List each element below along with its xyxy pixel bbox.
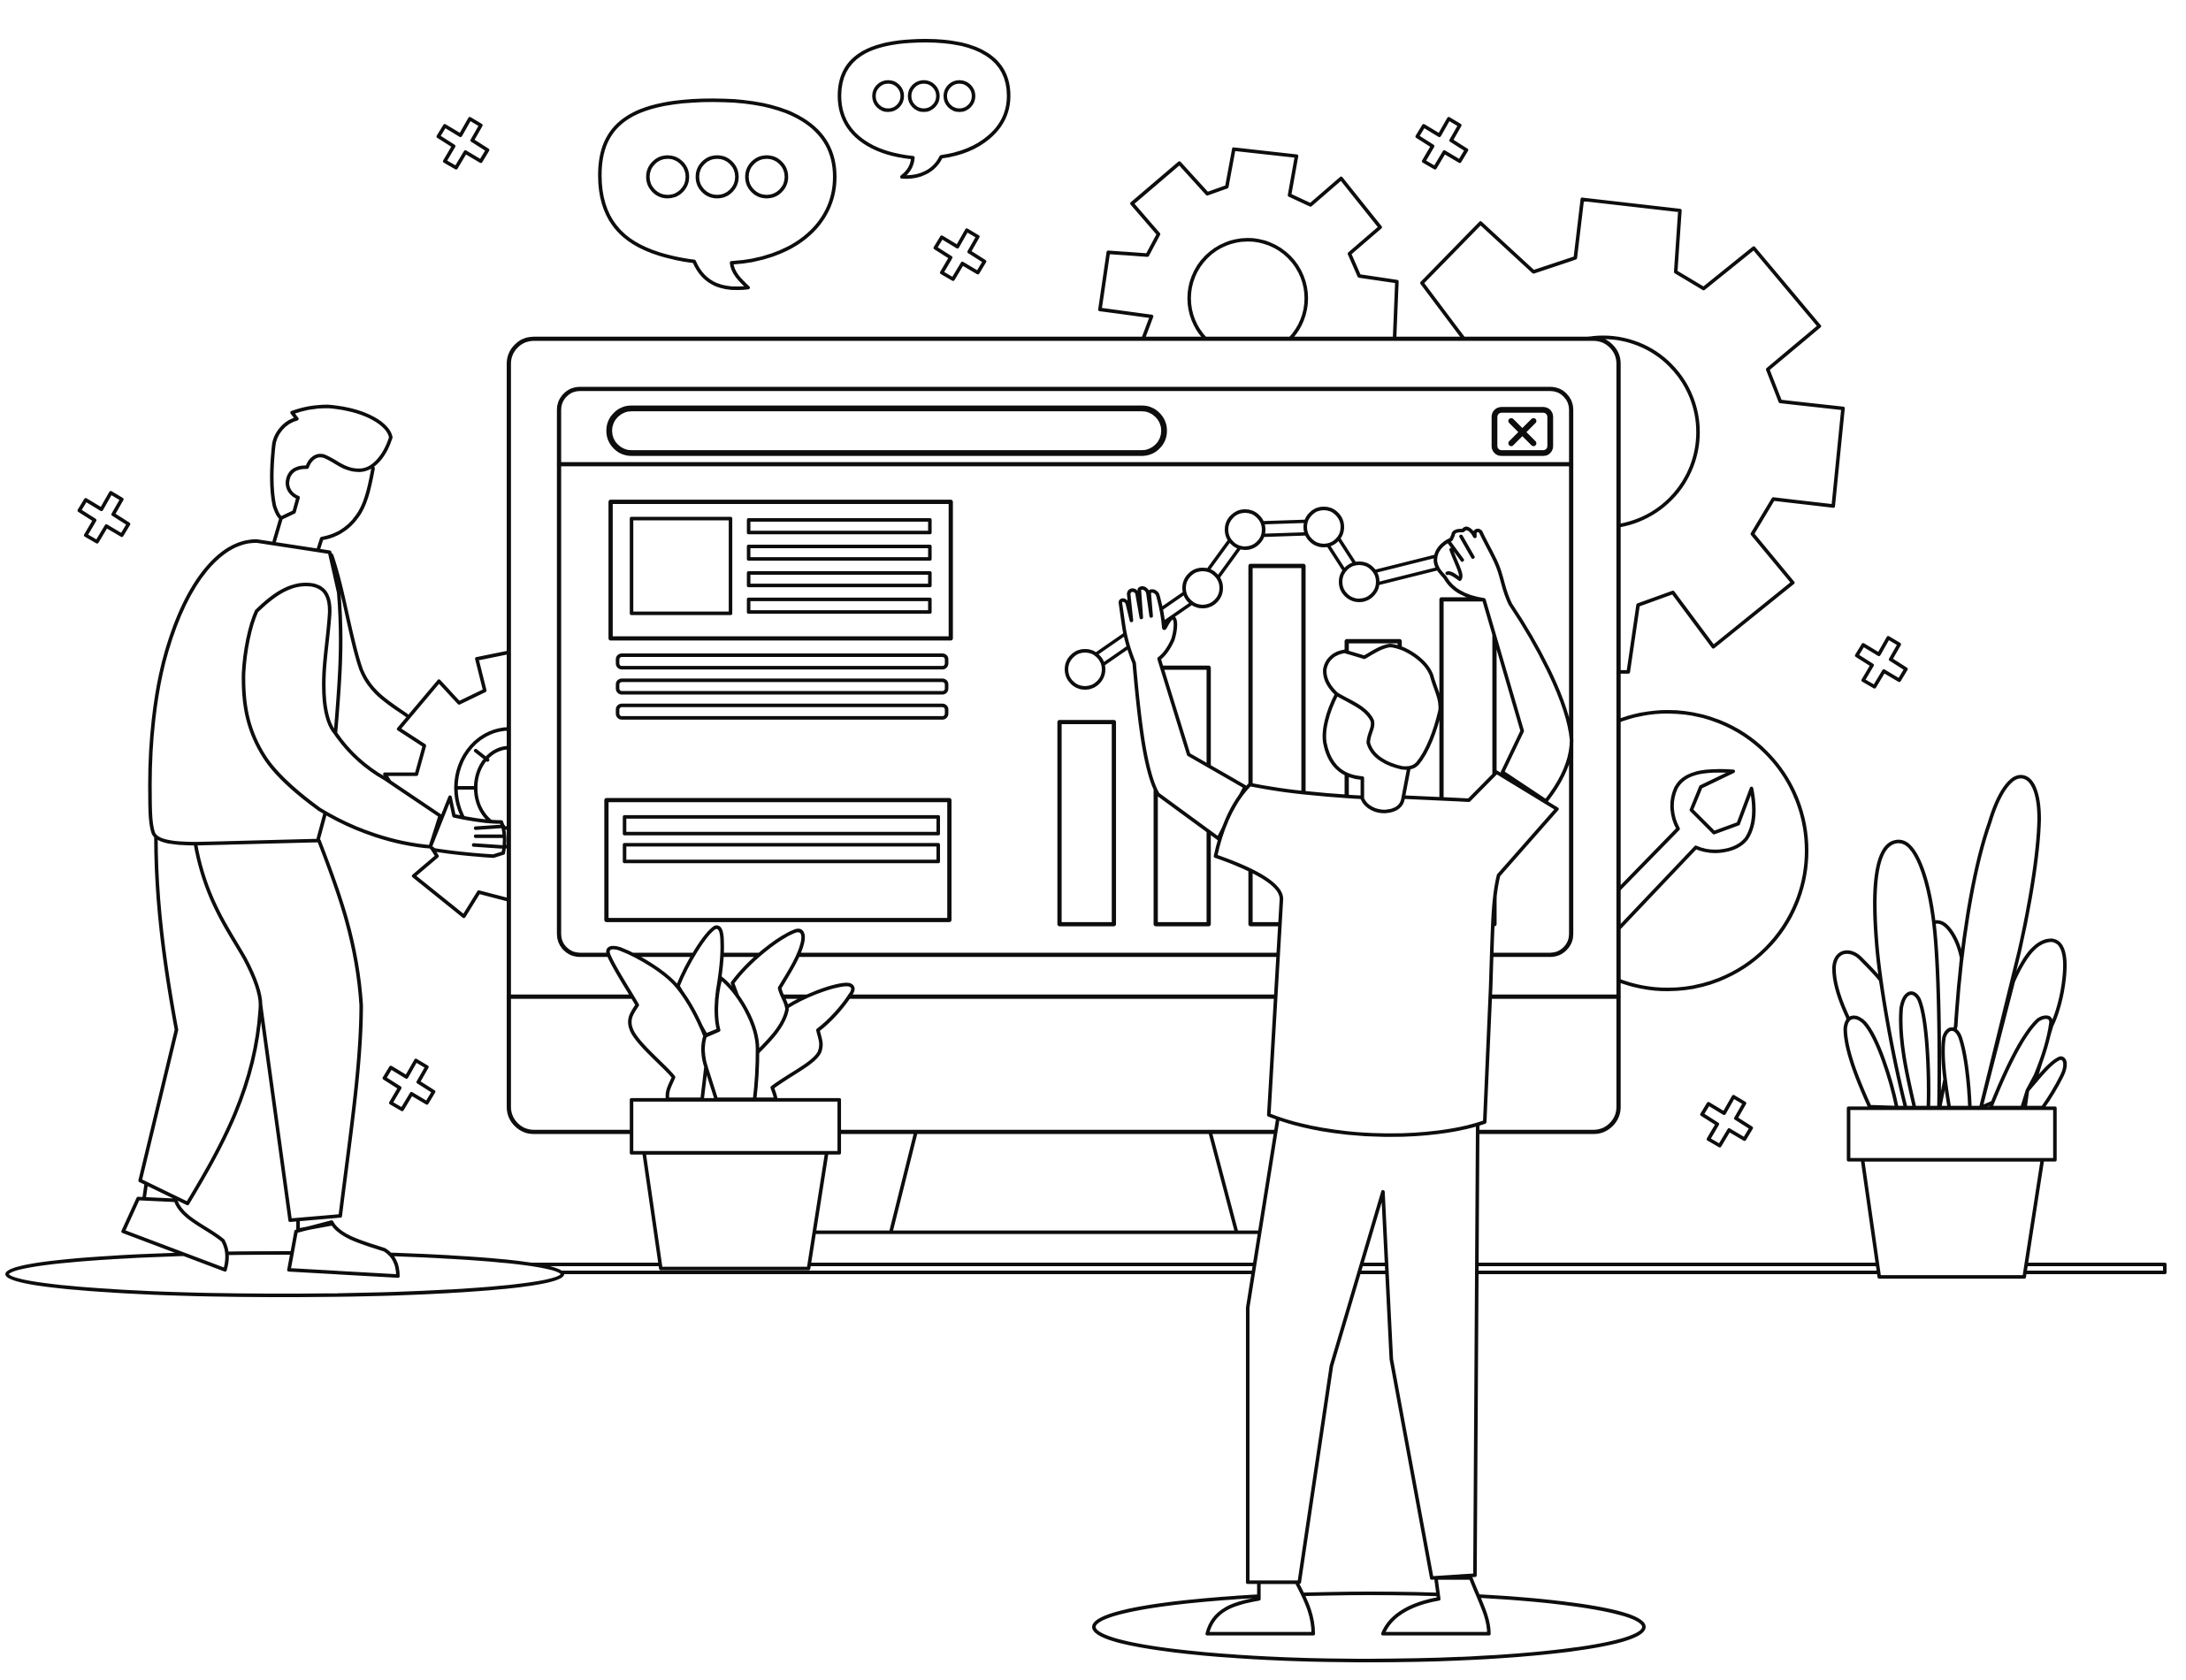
shirt xyxy=(1216,772,1557,1135)
ground ellipse left xyxy=(7,1253,562,1295)
person left xyxy=(123,407,505,1276)
circle with wrench xyxy=(1529,712,1807,989)
person right xyxy=(1120,529,1571,1634)
arm xyxy=(243,584,440,847)
person left: back arm xyxy=(332,555,407,715)
trousers xyxy=(140,837,361,1220)
arms, shirt and head xyxy=(1120,529,1571,1135)
line chart xyxy=(1066,508,1437,688)
potted plant right xyxy=(1834,776,2065,1277)
right arm xyxy=(1435,529,1571,801)
text lines xyxy=(617,655,946,718)
left shoes xyxy=(123,1185,398,1276)
speech bubble small xyxy=(839,41,1009,177)
pot xyxy=(1848,1108,2055,1277)
gear: left behind person xyxy=(385,653,592,916)
neck and face xyxy=(274,469,373,551)
potted plant left xyxy=(608,928,852,1269)
leaves xyxy=(1834,776,2065,1108)
address bar xyxy=(609,409,1164,453)
content card top xyxy=(611,502,951,638)
left arm xyxy=(1120,588,1245,838)
hair xyxy=(271,407,391,518)
speech bubble large xyxy=(600,100,835,288)
bar chart xyxy=(1059,566,1494,924)
floor line xyxy=(495,1264,2165,1272)
browser window xyxy=(559,389,1571,955)
torso xyxy=(150,541,340,844)
pot xyxy=(631,1100,839,1269)
plus sparkles xyxy=(80,118,1906,1146)
gear: large right xyxy=(1394,199,1843,672)
shoes and trousers xyxy=(1207,1115,1489,1634)
monitor stand xyxy=(812,1132,1262,1233)
monitor body xyxy=(508,339,1618,1132)
ground ellipse right xyxy=(1094,1593,1644,1661)
hair xyxy=(1325,645,1441,768)
hand xyxy=(431,798,505,856)
gear: top centre xyxy=(1100,149,1397,418)
face and neck xyxy=(1325,694,1409,812)
close button xyxy=(1494,409,1550,453)
icon: wrench xyxy=(1618,771,1754,928)
monitor xyxy=(508,339,1618,1233)
content card bottom xyxy=(607,800,950,920)
leaves xyxy=(608,928,852,1099)
